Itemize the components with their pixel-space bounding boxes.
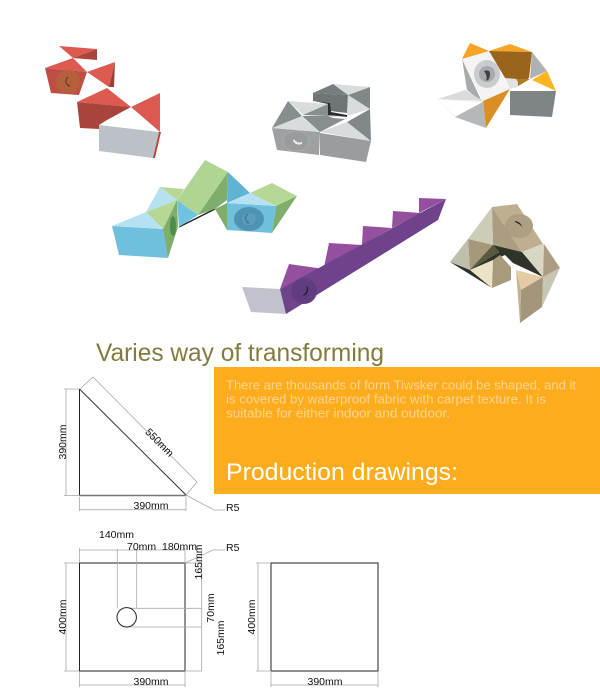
drawing: triangular side view bbox=[57, 377, 240, 514]
red folded shape bbox=[45, 46, 161, 158]
orange and white folded shape bbox=[437, 43, 556, 128]
drawing: front view with hole: 70mm bbox=[205, 593, 217, 623]
drawing: front view with hole: R5 bbox=[226, 542, 240, 554]
grey folded shape bbox=[272, 84, 371, 162]
drawing: front view with hole bbox=[57, 529, 240, 688]
beige folded shape bbox=[450, 204, 560, 323]
drawing: rear view: 400mm bbox=[246, 599, 258, 635]
description text: is covered by waterproof fabric with carpet texture. It is bbox=[226, 392, 546, 406]
icon: centre hole bbox=[117, 608, 136, 627]
panel: description and production drawings heading bbox=[214, 367, 600, 494]
drawing: front view with hole: 70mm bbox=[127, 541, 156, 553]
drawing: rear view: 390mm bbox=[307, 676, 343, 688]
drawing: rear view bbox=[246, 563, 378, 688]
heading: production drawings: Production drawings: bbox=[226, 459, 458, 486]
drawing: front view with hole: 390mm bbox=[133, 676, 169, 688]
blue and green folded shape bbox=[112, 160, 297, 258]
drawing: triangular side view: 390mm bbox=[57, 424, 69, 460]
drawing: front view with hole: 400mm bbox=[57, 599, 69, 635]
description text bbox=[226, 378, 577, 420]
drawing: triangular side view: R5 bbox=[226, 502, 240, 514]
drawing: triangular side view: 390mm bbox=[133, 500, 169, 512]
description text: suitable for either indoor and outdoor. bbox=[226, 406, 450, 420]
drawing: front view with hole: 165mm bbox=[193, 544, 205, 580]
title: Varies way of transforming bbox=[96, 339, 384, 367]
purple zigzag shape bbox=[242, 198, 446, 314]
drawing: triangular side view: 550mm bbox=[142, 426, 176, 460]
description text: There are thousands of form Tiwsker could be shaped, and it bbox=[226, 378, 577, 392]
drawing: front view with hole: 180mm bbox=[162, 541, 197, 553]
drawing: front view with hole: 140mm bbox=[99, 529, 134, 541]
drawing: front view with hole: 165mm bbox=[215, 620, 227, 656]
